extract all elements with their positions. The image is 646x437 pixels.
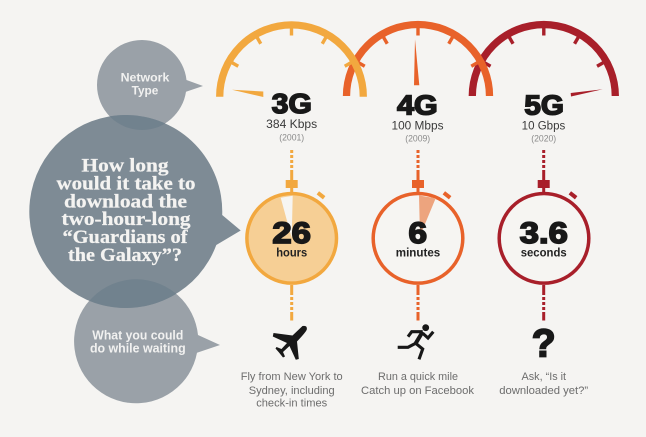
- icon: airplane: [273, 326, 307, 360]
- caption: 4G activity: [361, 371, 474, 397]
- bubble: what you could do while waiting: [74, 279, 220, 403]
- stopwatch: 4G 6 minutes: [373, 150, 463, 320]
- label: 5G speed: [522, 90, 566, 143]
- label: 5G speed: 5G: [524, 90, 564, 121]
- caption: 5G activity: downloaded yet?”: [499, 385, 588, 397]
- gauge: 5G: [472, 25, 615, 96]
- bubble: network type: [97, 40, 203, 130]
- stopwatch: 3G 26 hours: 26: [272, 217, 311, 250]
- gauge: 4G: [346, 24, 490, 96]
- stopwatch: 5G 3.6 seconds: 3.6: [520, 217, 568, 250]
- icon: question mark: ?: [532, 322, 556, 365]
- label: 3G speed: 384 Kbps: [266, 119, 317, 131]
- label: 5G speed: 10 Gbps: [522, 120, 566, 132]
- bubble: network type: Type: [132, 85, 158, 97]
- caption: 4G activity: Run a quick mile: [378, 371, 458, 383]
- bubble: main question: two-hour-long: [62, 210, 191, 230]
- bubble: main question: [29, 115, 241, 308]
- caption: 3G activity: Sydney, including: [249, 385, 335, 397]
- gauge: 3G: [220, 25, 363, 97]
- bubble: main question: would it take to: [56, 174, 196, 194]
- bubble: what you could do while waiting: What you could: [92, 328, 183, 342]
- label: 4G speed: (2009): [405, 133, 430, 143]
- caption: 3G activity: check-in times: [256, 398, 328, 410]
- label: 5G speed: (2020): [531, 133, 556, 143]
- label: 3G speed: [266, 88, 317, 143]
- caption: 5G activity: [499, 371, 588, 397]
- stopwatch: 3G 26 hours: hours: [276, 246, 307, 260]
- icon: runner: [398, 324, 433, 359]
- bubble: main question: the Galaxy”?: [68, 246, 182, 266]
- stopwatch: 5G 3.6 seconds: [499, 150, 589, 320]
- stopwatch: 4G 6 minutes: 6: [409, 217, 427, 250]
- stopwatch: 4G 6 minutes: minutes: [396, 246, 441, 260]
- bubble: main question: “Guardians of: [62, 228, 188, 248]
- caption: 3G activity: [241, 371, 343, 410]
- stopwatch: 3G 26 hours: [247, 150, 336, 320]
- bubble: main question: How long: [82, 157, 169, 177]
- label: 4G speed: 4G: [397, 90, 438, 121]
- stopwatch: 5G 3.6 seconds: seconds: [521, 246, 567, 260]
- label: 4G speed: 100 Mbps: [392, 120, 444, 132]
- label: 4G speed: [392, 90, 444, 143]
- caption: 5G activity: Ask, “Is it: [522, 371, 567, 383]
- caption: 3G activity: Fly from New York to: [241, 371, 343, 383]
- bubble: main question: download the: [64, 192, 187, 212]
- bubble: network type: Network: [121, 73, 170, 85]
- bubble: what you could do while waiting: do while waiting: [90, 341, 186, 355]
- label: 3G speed: 3G: [272, 88, 312, 119]
- caption: 4G activity: Catch up on Facebook: [361, 385, 474, 397]
- label: 3G speed: (2001): [279, 133, 304, 143]
